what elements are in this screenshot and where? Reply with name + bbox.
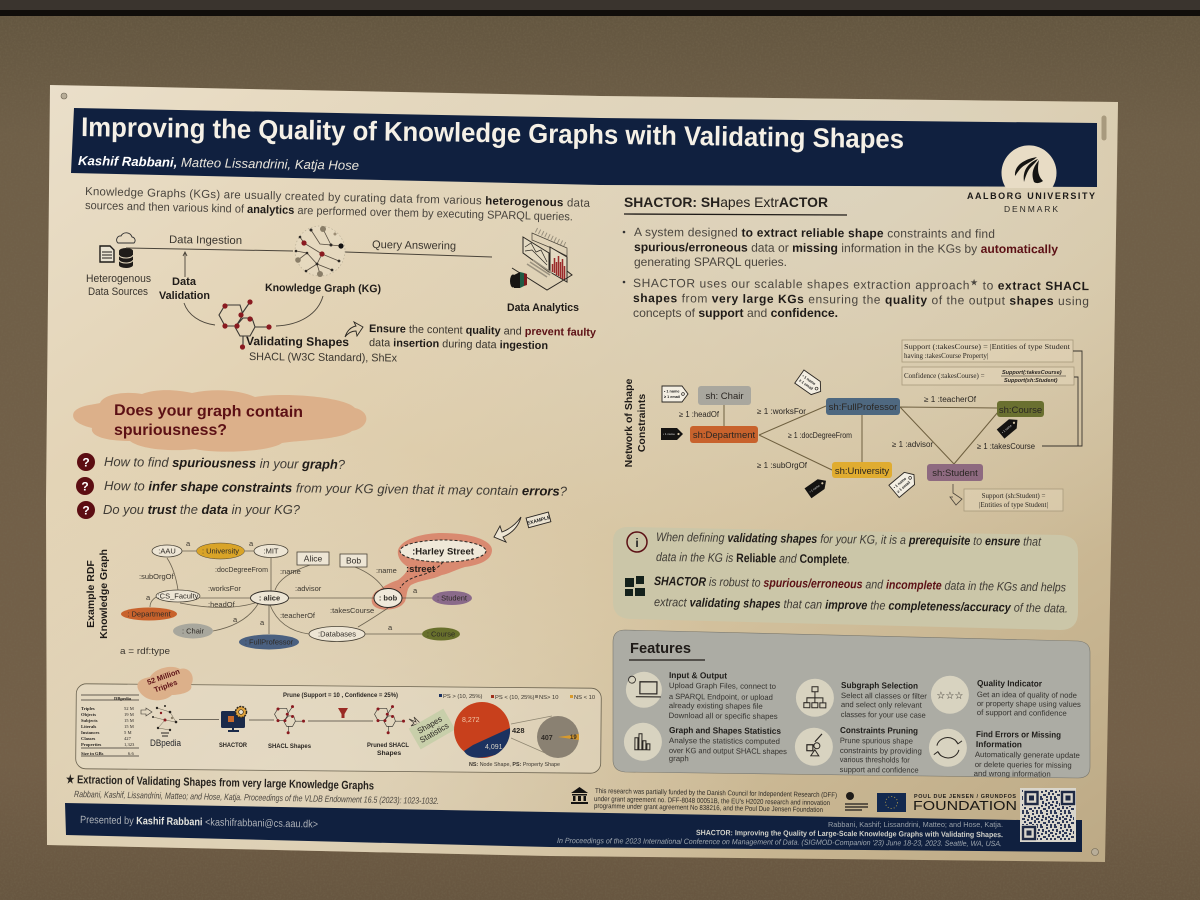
funding text line 2: under grant agreement no. DFF-8048 00051B, the EU's H2020 research and innovation <box>594 796 830 807</box>
edge labels <box>139 539 418 632</box>
node: sh Course <box>997 401 1044 417</box>
node: Chair: : Chair <box>182 626 205 636</box>
node: bob: : bob <box>379 594 398 602</box>
feature: input and output: Download all or specific shapes <box>669 711 778 721</box>
feature: subgraph selection: classes for your use case <box>841 710 926 720</box>
arrow: dbpedia to shactor <box>179 718 219 720</box>
robustness text line 2: extract validating shapes that can improve the completeness/accuracy of the data. <box>654 595 1068 616</box>
bullet 2: shapes from very large KGs ensuring the quality of the output shapes using <box>633 291 1089 308</box>
icon: institution <box>571 787 588 804</box>
node: AAU: :AAU <box>158 546 176 556</box>
feature: input and output: Input & Output <box>669 670 727 681</box>
chart legend: NS < 10 <box>574 695 595 701</box>
icon: funnel <box>338 708 348 718</box>
icon: validating shapes <box>219 299 272 350</box>
funding text line 3: programme under grant agreement No 838216, and the Poul Due Jensen Foundation <box>594 803 823 814</box>
arrow: data ingestion <box>126 248 293 251</box>
callout: 52 million triples: Triples <box>153 678 179 694</box>
reference: extraction paper: Rabbani, Kashif, Lissandrini, Matteo; and Hose, Katja. Proceedings of the VLDB Endowment 16.5 (2023): 1023-1032. <box>74 789 439 806</box>
node: Harley Street: :Harley Street <box>412 546 475 558</box>
node: CS_Faculty: :CS_Faculty <box>158 592 199 600</box>
dbpedia statistics table <box>81 695 139 756</box>
rdf knowledge graph <box>120 512 552 657</box>
edge labels: :docDegreeFrom <box>215 565 268 574</box>
edge labels: :worksFor <box>208 584 241 593</box>
street edge <box>400 562 443 588</box>
knowledge graph label: Knowledge Graph (KG) <box>265 282 381 295</box>
chart legend: PS < (10, 25%) <box>495 695 535 701</box>
arrow: student to support <box>950 484 962 505</box>
node: FullProfessor: : FullProfessor <box>245 638 294 646</box>
feature: input and output: a SPARQL Endpoint, or upload <box>669 692 773 702</box>
node: sh FullProfessor <box>826 398 900 415</box>
citation <box>557 820 1003 848</box>
authors: Kashif Rabbani, Matteo Lissandrini, Katja Hose <box>78 153 359 173</box>
question 1: ? <box>82 456 90 470</box>
node: sh Course: sh:Course <box>999 405 1042 416</box>
callout: 52 million triples <box>137 667 193 700</box>
feature: find errors: Find Errors or Missing <box>976 729 1061 740</box>
network edge labels: ≥ 1 :headOf <box>679 410 720 419</box>
dbpedia statistics table: DBpedia <box>114 696 132 701</box>
node: MIT <box>254 544 288 558</box>
bullet 1: generating SPARQL queries. <box>634 255 787 269</box>
icon: pruned shacl shapes <box>375 705 405 734</box>
arrow: data validation <box>183 252 187 277</box>
icon: info: i <box>635 536 639 550</box>
node: sh University <box>832 462 892 478</box>
network of shape constraints heading <box>623 379 648 467</box>
feature: quality indicator: of support and confidence <box>977 708 1067 718</box>
network edge labels <box>679 395 1036 470</box>
feature: graph and shapes statistics: Analyse the statistics computed <box>669 736 780 746</box>
icon: dbpedia bulb <box>152 705 177 736</box>
value: 428: 428 <box>512 726 525 735</box>
feature: subgraph selection <box>796 679 927 720</box>
chart legend <box>439 694 595 701</box>
question 3: Do you trust the data in your KG? <box>103 502 301 517</box>
shactor bullets <box>623 225 1089 320</box>
dbpedia statistics table: Classes <box>81 736 96 741</box>
bullet 2: ★ <box>970 277 978 287</box>
dbpedia statistics table: Size in GBs <box>81 751 104 756</box>
node: Harley Street <box>400 540 486 562</box>
example rdf graph heading: Example RDF <box>85 560 97 628</box>
arrow: query answering <box>345 252 492 257</box>
node: sh FullProfessor: sh:FullProfessor <box>829 402 897 413</box>
qr code <box>1020 788 1076 842</box>
citation: In Proceedings of the 2023 International Conference on Management of Data. (SIGMOD-Companion '23) June 18-23, 2023. Seattle, WA, USA. <box>557 836 1002 848</box>
support definition <box>902 340 1073 362</box>
pruned shapes label line 2: Shapes <box>377 750 401 757</box>
poster sheet <box>46 85 1118 862</box>
logo: Aalborg University: DENMARK <box>1004 204 1058 214</box>
dbpedia statistics table: 19 M <box>124 712 134 717</box>
dbpedia statistics table: Objects <box>81 712 96 717</box>
panel: prerequisite note <box>613 527 1078 630</box>
pin: bottom right <box>1092 848 1098 856</box>
icon: shactor computer <box>221 706 246 731</box>
data validation label: Validation <box>159 290 210 302</box>
feature: quality indicator <box>931 676 1081 718</box>
heterogenous data sources label: Heterogenous <box>86 273 151 285</box>
arrow: prune <box>308 720 373 722</box>
student support definition: |Entities of type Student| <box>979 501 1048 509</box>
arrow: knowledge graph to shapes <box>276 296 323 326</box>
shactor heading: SHACTOR: SHapes ExtrACTOR <box>624 194 828 210</box>
bullet 1: spurious/erroneous data or missing information in the KGs by automatically <box>634 240 1058 256</box>
icon: data analytics <box>510 230 572 290</box>
example rdf graph heading: Knowledge Graph <box>98 549 110 639</box>
edge labels: :headOf <box>208 600 236 609</box>
feature: find errors: Automatically generate update <box>975 750 1080 760</box>
footer banner <box>65 803 1082 852</box>
funding text: This research was partially funded by the Danish Council for Independent Research (DFF) <box>595 788 837 799</box>
tag: example: EXAMPLE <box>526 515 552 527</box>
edge labels: :advisor <box>295 584 322 593</box>
tag: shapes statistics: Shapes <box>416 714 444 736</box>
feature: subgraph selection: and select only relevant <box>841 700 923 710</box>
node: Student <box>432 591 472 605</box>
node: sh University: sh:University <box>835 466 889 477</box>
data ingestion label: Data Ingestion <box>169 234 242 247</box>
edge labels: a <box>186 539 191 548</box>
bullet 1: A system designed to extract reliable shape constraints and find <box>634 225 995 241</box>
node: sh Student: sh:Student <box>932 468 978 479</box>
student support definition: Support (sh:Student) = <box>982 492 1045 500</box>
edge labels: :name <box>376 566 397 575</box>
logo: poul due jensen grundfos foundation: FOUNDATION <box>913 798 1017 813</box>
icon: shacl shapes <box>275 705 305 734</box>
node: Databases: :Databases <box>318 630 356 638</box>
node: University: : University <box>202 546 239 556</box>
network edge labels: ≥ 1 :advisor <box>892 440 933 449</box>
icon: puzzle <box>625 576 645 596</box>
pin: top right <box>1102 118 1106 138</box>
question 1: How to find spuriousness in your graph? <box>104 454 346 472</box>
chart legend: PS > (10, 25%) <box>443 694 483 700</box>
feature: quality indicator: or property shape using values <box>977 699 1081 709</box>
arrow: to statistics <box>409 717 420 726</box>
tag: shapes statistics <box>409 709 455 749</box>
feature: graph and shapes statistics <box>624 723 787 764</box>
feature: input and output: already existing shapes file <box>669 701 763 711</box>
bracket connectors <box>1042 351 1082 446</box>
edge labels: a <box>233 615 238 624</box>
data analytics label: Data Analytics <box>507 302 579 314</box>
tag: student constraints <box>889 469 919 497</box>
node: Department: : Department <box>127 610 172 618</box>
dbpedia statistics table: 1,323 <box>124 742 135 748</box>
pie chart: node shapes: 407 <box>541 735 553 742</box>
dbpedia label: DBpedia <box>150 738 181 748</box>
tag: shapes statistics: Statistics <box>418 721 450 745</box>
node: alice: : alice <box>259 594 280 602</box>
logo: Aalborg University <box>967 145 1095 214</box>
legend: rdf type: a = rdf:type <box>120 646 170 657</box>
tag: course constraint <box>997 415 1021 439</box>
presenter: Presented by Kashif Rabbani <kashifrabbani@cs.aau.dk> <box>80 814 318 831</box>
example rdf graph heading <box>85 549 110 639</box>
network of shape constraints heading: Constraints <box>636 394 648 452</box>
feature: find errors: or delete queries for missing <box>975 760 1072 770</box>
edge labels: :subOrgOf <box>139 572 175 581</box>
validating shapes label: Validating Shapes <box>246 334 349 349</box>
bullet 2 <box>623 275 1089 320</box>
edge labels: :takesCourse <box>330 606 374 615</box>
feature: subgraph selection: Select all classes or filter <box>841 691 927 701</box>
edge labels: a <box>146 593 151 602</box>
tag: chair constraints <box>662 386 688 402</box>
highlight blob: street property <box>372 533 492 610</box>
confidence definition: Support(:takesCourse) <box>1002 370 1062 376</box>
feature: constraints pruning: constraints by providing <box>840 746 922 756</box>
node: Alice literal: Alice <box>304 554 322 564</box>
feature: subgraph selection: Subgraph Selection <box>841 680 918 691</box>
edge labels: :name <box>280 567 301 576</box>
citation: SHACTOR: Improving the Quality of Large-Scale Knowledge Graphs with Validating Shapes. <box>696 828 1003 839</box>
bullet 1 <box>623 225 1058 269</box>
feature: quality indicator: Get an idea of quality of node <box>977 690 1077 700</box>
arrow: example pointer <box>494 517 521 542</box>
street label: :street <box>406 564 436 575</box>
feature: find errors <box>929 729 1080 779</box>
shactor label: SHACTOR <box>219 742 247 749</box>
intro text: Knowledge Graphs (KGs) are usually created by curating data from various heterogenous data <box>85 186 591 210</box>
pie chart: shapes: 4,091 <box>485 744 503 751</box>
dbpedia statistics table: 52 M <box>124 706 134 711</box>
network edge labels: ≥ 1 :takesCourse <box>977 442 1036 451</box>
pruned shapes label: Pruned SHACL <box>367 742 409 749</box>
citation: Rabbani, Kashif; Lissandrini, Matteo; and Hose, Katja. <box>828 820 1003 829</box>
arrow: shapes to data validation <box>184 303 215 325</box>
bullet 2: concepts of support and confidence. <box>633 306 838 320</box>
tag: full professor constraints <box>795 370 825 398</box>
node: AAU <box>152 545 182 557</box>
question 3: ? <box>82 504 90 518</box>
heterogenous data sources label: Data Sources <box>88 286 148 298</box>
feature: constraints pruning: various thresholds for <box>840 755 910 765</box>
icon: knowledge graph <box>295 226 345 277</box>
pie chart: shapes: 8,272 <box>462 717 480 724</box>
node: Chair <box>173 624 213 638</box>
node: Course <box>422 628 460 640</box>
node: sh Chair: sh: Chair <box>705 391 744 402</box>
feature: find errors: and wrong information <box>974 769 1051 779</box>
network of shape constraints heading: Network of Shape <box>623 379 635 467</box>
feature: input and output <box>626 670 778 721</box>
shacl caption: SHACL (W3C Standard), ShEx <box>249 351 398 365</box>
feature: quality indicator: Quality Indicator <box>977 678 1043 689</box>
edge labels: a <box>249 539 254 548</box>
panel: features <box>613 630 1090 779</box>
icon: info <box>627 532 647 552</box>
feature: graph and shapes statistics: Graph and Shapes Statistics <box>669 725 781 736</box>
node: alice <box>250 591 288 605</box>
dbpedia statistics table: 427 <box>124 736 132 741</box>
pie chart: node shapes: 19 <box>570 735 577 741</box>
callout: does your graph contain spuriousness: Does your graph contain <box>114 402 303 421</box>
network edge labels: ≥ 1 :teacherOf <box>924 395 977 404</box>
tag: university constraint <box>805 476 829 498</box>
question 2: How to infer shape constraints from your KG given that it may contain errors? <box>104 478 568 499</box>
intro text: sources and then various kind of analytics are performed over them by executing SPARQL queries. <box>85 200 573 223</box>
student support definition <box>964 489 1063 511</box>
edge labels: :teacherOf <box>280 611 316 620</box>
callout: does your graph contain spuriousness <box>73 390 366 452</box>
feature: graph and shapes statistics: over KG and output SHACL shapes <box>669 746 787 756</box>
logo: poul due jensen grundfos foundation <box>913 794 1017 813</box>
callout: 52 million triples: 52 Million <box>146 667 181 687</box>
pie chart: node shapes <box>537 716 579 758</box>
icon: data sources <box>100 233 135 268</box>
feature: constraints pruning: Constraints Pruning <box>840 725 918 736</box>
confidence definition <box>902 367 1074 385</box>
chart note: NS: Node Shape, PS: Property Shape <box>469 762 560 768</box>
dbpedia statistics table: 15 M <box>124 724 134 729</box>
features heading <box>629 640 705 660</box>
node: sh Department <box>690 426 758 443</box>
dbpedia statistics table: 15 M <box>124 718 134 723</box>
feature: graph and shapes statistics: graph <box>669 754 689 763</box>
node: Student: : Student <box>437 594 468 602</box>
node: sh Chair <box>698 386 751 405</box>
logo: eu flag <box>877 793 906 812</box>
diagram: data flow <box>86 226 597 365</box>
support definition: having :takesCourse Property| <box>904 352 988 360</box>
pipeline panel <box>76 667 601 773</box>
bullet 2: to <box>979 278 997 293</box>
icon: hollow arrow <box>345 322 363 337</box>
feature: constraints pruning <box>795 725 922 775</box>
feature: find errors: Information <box>976 739 1022 749</box>
edge labels: a <box>260 618 265 627</box>
pin: top left <box>61 93 67 99</box>
tag: department constraint <box>661 428 683 440</box>
shacl shapes label: SHACL Shapes <box>268 743 311 750</box>
prune settings label: Prune (Support = 10 , Confidence = 25%) <box>283 692 398 699</box>
callout: does your graph contain spuriousness: spuriousness? <box>114 422 227 439</box>
node: University <box>196 543 244 559</box>
network edge labels: ≥ 1 :worksFor <box>757 407 806 416</box>
intro text <box>85 186 591 223</box>
chart legend: NS> 10 <box>539 695 558 701</box>
edge labels: a <box>388 623 393 632</box>
bullet 2: extract SHACL <box>998 279 1089 293</box>
feature: constraints pruning: support and confidence <box>840 765 919 775</box>
bullet 2: SHACTOR uses our scalable shapes extraction approach <box>633 276 970 292</box>
arrow: shactor to shapes <box>249 719 274 721</box>
network of shape constraints <box>661 340 1082 511</box>
node: MIT: :MIT <box>264 546 279 556</box>
reference: extraction paper <box>66 773 439 806</box>
node: Department <box>121 608 177 620</box>
pie chart: shapes <box>454 702 510 758</box>
network edge labels: ≥ 1 :docDegreeFrom <box>788 431 852 440</box>
node: Alice literal <box>297 552 329 565</box>
confidence definition: Support(sh:Student) <box>1004 378 1058 384</box>
title: Improving the Quality of Knowledge Graphs with Validating Shapes <box>81 112 904 154</box>
edge labels: a <box>413 586 418 595</box>
prerequisite text line 2: data in the KG is Reliable and Complete. <box>656 550 850 566</box>
ensure statement: data insertion during data ingestion <box>369 337 548 352</box>
features heading: Features <box>630 640 691 657</box>
confidence definition: Confidence (:takesCourse) = <box>904 372 985 380</box>
dbpedia statistics table: Properties <box>81 742 102 747</box>
ensure statement: Ensure the content quality and prevent faulty <box>369 323 597 339</box>
logo: danish research council <box>845 792 868 810</box>
node: bob <box>374 588 402 608</box>
prerequisite text: When defining validating shapes for your KG, it is a prerequisite to ensure that <box>656 530 1042 549</box>
dbpedia statistics table: Triples <box>81 706 95 711</box>
node: Course: : Course <box>427 630 455 638</box>
node: Bob literal <box>340 554 367 567</box>
logo: poul due jensen grundfos foundation: POUL DUE JENSEN / GRUNDFOS <box>914 794 1016 800</box>
node: Databases <box>309 626 365 642</box>
dbpedia statistics table: Subjects <box>81 718 98 723</box>
funding acknowledgement <box>571 787 837 814</box>
node: sh Department: sh:Department <box>693 430 756 441</box>
logo: Aalborg University: AALBORG UNIVERSITY <box>967 191 1095 201</box>
ensure statement <box>369 323 597 352</box>
reference: extraction paper: ★ Extraction of Validating Shapes from very large Knowledge Graphs <box>66 773 374 792</box>
questions list <box>76 453 568 519</box>
network edge labels: ≥ 1 :subOrgOf <box>757 461 808 470</box>
feature: input and output: Upload Graph Files, connect to <box>669 681 777 691</box>
title banner <box>71 108 1097 187</box>
dbpedia statistics table: 5 M <box>124 730 132 735</box>
dbpedia statistics table: Literals <box>81 724 97 729</box>
node: CS_Faculty <box>156 590 200 602</box>
node: Bob literal: Bob <box>346 556 361 566</box>
node: FullProfessor <box>239 634 299 650</box>
query answering label: Query Answering <box>372 239 456 252</box>
data validation label: Data <box>172 276 197 288</box>
question 2: ? <box>81 480 89 494</box>
dbpedia statistics table: 6.6 <box>128 751 134 756</box>
pie zoom connectors <box>511 716 552 756</box>
dbpedia statistics table: Instances <box>81 730 100 735</box>
node: sh Student <box>927 464 983 481</box>
support definition: Support (:takesCourse) = |Entities of type Student <box>904 343 1070 351</box>
robustness text: SHACTOR is robust to spurious/erroneous and incomplete data in the KGs and helps <box>654 574 1066 594</box>
feature: constraints pruning: Prune spurious shape <box>840 736 913 746</box>
arrow: dbpedia to table <box>141 708 152 716</box>
feature: quality indicator: ☆☆☆ <box>936 691 963 702</box>
